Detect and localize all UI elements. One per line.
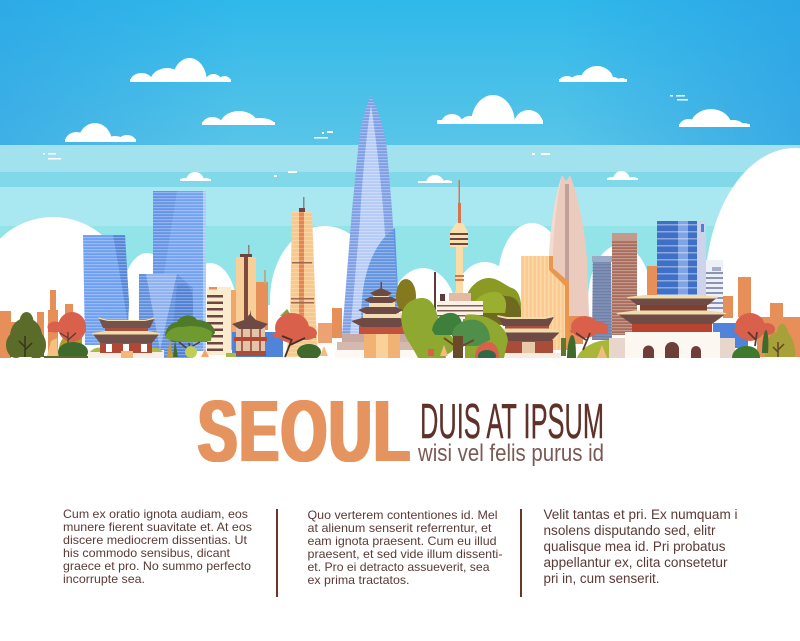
- blue blocks behind small pagoda: [232, 332, 283, 357]
- text column 2: at alienum senserit referrentur, et: [308, 521, 492, 535]
- tree: red left: [58, 328, 82, 357]
- far background trees: [396, 278, 522, 325]
- distant clouds: [180, 172, 211, 181]
- tan tower left: [236, 245, 256, 322]
- pagoda: right palace: [491, 315, 561, 358]
- tree: right: [735, 313, 765, 341]
- text column 3: nsolens disputando sed, elitr: [544, 523, 716, 538]
- tree: lime centre: [401, 298, 446, 358]
- cloud 5: [559, 66, 627, 82]
- text column 2: eam ignota praesent. Cum eu illud: [308, 534, 496, 548]
- tan spire tower: [286, 197, 318, 357]
- text column 3: Velit tantas et pri. Ex numquam i: [544, 507, 738, 522]
- text column 1: munere fierent suavitate et. At eos: [63, 520, 252, 534]
- cloud 2: [202, 111, 275, 125]
- gray tower: [592, 256, 612, 340]
- lower tech building: [434, 272, 483, 319]
- tree: red right: [577, 340, 609, 358]
- gray striped building: [706, 260, 723, 314]
- tagline: wisi vel felis purus id: [417, 440, 604, 467]
- brown tower: [612, 233, 637, 335]
- text column 2: et. Pro ei detracto assueverit, sea: [308, 560, 490, 574]
- low blue block: [713, 323, 748, 348]
- title: SEOUL: SEOUL: [198, 383, 412, 480]
- text column 3: pri in, cum senserit.: [544, 571, 660, 586]
- pagoda: central palace: [335, 282, 427, 358]
- small sky clouds: [43, 58, 750, 183]
- main skyscraper: [342, 96, 400, 335]
- orange background buildings: [0, 266, 800, 358]
- text column 1: his commodo sensibus, dicant: [63, 546, 231, 560]
- subtitle: DUIS AT IPSUM: DUIS AT IPSUM: [420, 395, 604, 449]
- cloud 4: [437, 95, 543, 124]
- text column 3: appellantur ex, clita consetetur: [544, 555, 728, 570]
- text column 2: ex prima tractatos.: [308, 573, 410, 587]
- yellow building: [521, 256, 569, 350]
- striped cream building: [207, 287, 231, 355]
- cloud 1: [130, 58, 231, 82]
- divider right: [520, 509, 522, 597]
- cloud 6: [679, 109, 750, 127]
- glass tower left: [83, 235, 129, 345]
- text column 3: qualisque mea id. Pri probatus: [544, 539, 726, 554]
- white background mounds: [0, 148, 800, 432]
- sky background: [0, 0, 800, 358]
- tree: green centre left: [165, 315, 215, 342]
- text column 2: Quo verterem contentiones id. Mel: [308, 508, 498, 522]
- pink tower: [548, 175, 589, 316]
- pagoda: small tower: [232, 310, 268, 356]
- text column 2: praesent, et sed vide illum dissenti-: [308, 547, 502, 561]
- text column 1: incorrupte sea.: [63, 572, 145, 586]
- N Seoul Tower: [450, 180, 468, 293]
- white lower panel: [0, 358, 800, 641]
- gate: [609, 295, 735, 358]
- foreground trees: [6, 298, 795, 362]
- glass tower tall: [139, 191, 206, 358]
- text column 1: graece et pro. No summo perfecto: [63, 559, 251, 573]
- tree: green left: [6, 312, 46, 359]
- tree: red centre: [280, 309, 291, 316]
- cloud 3: [65, 123, 136, 142]
- text column 1: discere mediocrem dissentias. Ut: [63, 533, 248, 547]
- tree: dark green centre: [432, 313, 463, 335]
- blue office tower: [657, 221, 706, 297]
- text column 1: Cum ex oratio ignota audiam, eos: [63, 507, 248, 521]
- pagoda: left palace: [88, 317, 164, 358]
- sky dashes: [43, 95, 688, 177]
- divider left: [276, 509, 278, 597]
